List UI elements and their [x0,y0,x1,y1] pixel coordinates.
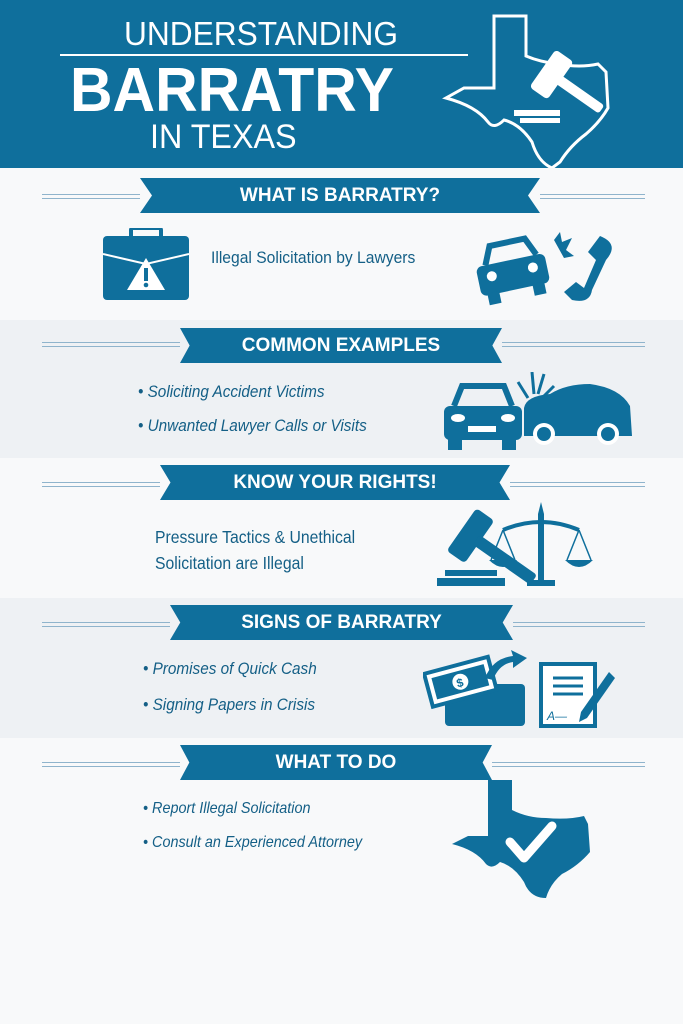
bullet list [138,382,367,435]
bullet list: • Soliciting Accident Victims [138,382,324,401]
header band [0,0,683,168]
icon: gavel and scales [437,502,593,586]
banner: what is barratry: WHAT IS BARRATRY? [240,185,440,206]
banner: know your rights: KNOW YOUR RIGHTS! [233,472,437,493]
title: understanding: UNDERSTANDING [124,15,398,52]
icon: briefcase warning [103,228,189,300]
icon: two cars crash [444,372,632,450]
icon: cash and document: $ [455,675,465,691]
banner: what is barratry [140,178,540,213]
banner: know your rights [160,465,510,500]
banner: what to do [180,745,492,780]
bullet list: what to do [143,800,363,851]
text: pressure tactics [155,527,355,573]
icon: texas with checkmark [452,780,590,898]
bullet list: what to do: • Report Illegal Solicitation [143,800,311,817]
bullet list: • Promises of Quick Cash [143,659,317,678]
banner: what to do: WHAT TO DO [276,752,396,773]
text: illegal solicitation: Illegal Solicitation by Lawyers [211,248,415,267]
panel: signs of barratry [0,598,683,738]
panel: common examples [0,320,683,458]
title: barratry: BARRATRY [70,56,394,125]
banner: signs: SIGNS OF BARRATRY [241,612,442,633]
icon: car crash and phone [476,232,612,306]
bullet list [143,659,317,714]
banner: signs [170,605,513,640]
icon: cash and document: A— [546,709,568,723]
bullet list: • Signing Papers in Crisis [143,695,315,714]
title: in texas: IN TEXAS [150,118,297,156]
banner: common examples: COMMON EXAMPLES [242,335,440,356]
icon: cash and document [423,650,615,728]
bullet list: what to do: • Consult an Experienced Attorney [143,834,362,851]
icon: texas outline with gavel [442,14,610,168]
banner: common examples [180,328,502,363]
bullet list: • Unwanted Lawyer Calls or Visits [138,416,367,435]
text: pressure tactics: Solicitation are Illegal [155,553,304,573]
text: pressure tactics: Pressure Tactics & Unethical [155,527,355,547]
